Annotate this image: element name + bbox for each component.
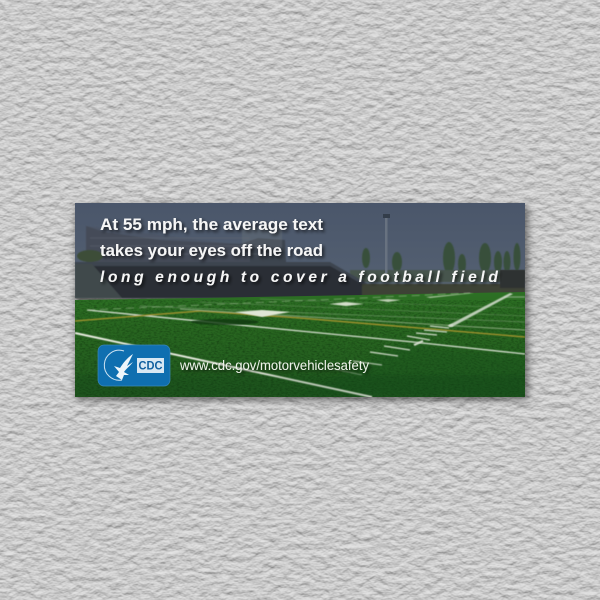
website url: www.cdc.gov/motorvehiclesafety — [179, 358, 369, 373]
sideline — [447, 293, 513, 327]
panel: football field photo — [75, 203, 525, 397]
CDC wordmark: CDC — [138, 358, 163, 372]
turf — [75, 292, 525, 397]
yard lines — [75, 293, 525, 397]
hash marks — [330, 297, 525, 375]
banner drop shadow — [76, 206, 528, 400]
sky — [75, 203, 525, 298]
headline — [100, 216, 501, 286]
grandstand — [75, 226, 525, 298]
headline line 1: At 55 mph, the average text — [100, 216, 324, 234]
logo: CDC badge — [98, 345, 170, 386]
headline line 2: takes your eyes off the road — [100, 242, 323, 260]
headline line 3: long enough to cover a football field — [100, 269, 501, 286]
treeline and light pole — [350, 214, 525, 282]
field numbers — [191, 293, 474, 325]
photo vignette — [262, 374, 372, 397]
icon: HHS eagle emblem — [104, 350, 133, 380]
